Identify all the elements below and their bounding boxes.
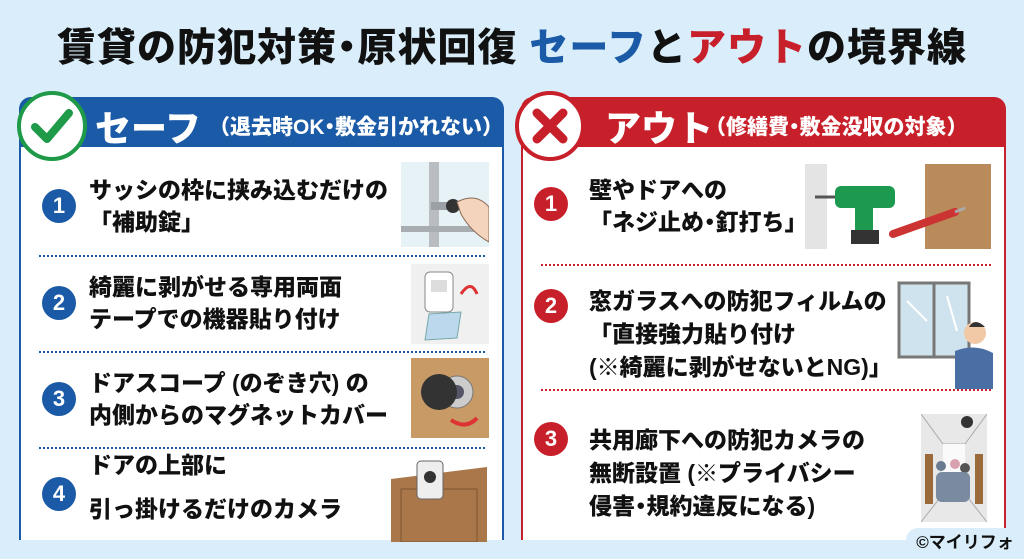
item 2: 綺麗に剥がせる専用両面 (89, 274, 342, 300)
title: 賃貸の防犯対策・原状回復 セーフとアウトの境界線 (57, 27, 967, 70)
item 1: 「補助錠」 (89, 209, 204, 235)
item 3 (42, 358, 489, 438)
icon: corridor camera (921, 414, 987, 522)
out header: （修繕費・敷金没収の対象） (705, 116, 968, 139)
safe header (19, 97, 504, 147)
item 1 (42, 162, 489, 247)
icon: sash lock (401, 162, 489, 247)
out item 3: 侵害・規約違反になる) (589, 493, 815, 519)
icon: window film (898, 282, 993, 389)
panel: safe (19, 97, 504, 540)
panel: out (521, 97, 1006, 540)
out item 2: (※綺麗に剥がせないとNG)」 (589, 354, 892, 380)
out item 1: 「ネジ止め・釘打ち」 (589, 209, 808, 235)
credit (906, 528, 1024, 559)
out header (521, 97, 1006, 147)
item 2 (42, 264, 489, 344)
out item 1 (534, 164, 991, 249)
item 4: ドアの上部に (89, 452, 227, 478)
item 1: サッシの枠に挟み込むだけの (89, 177, 388, 203)
out item 2 (534, 282, 993, 389)
out header: アウト (605, 108, 713, 149)
out item 3: 3 (545, 426, 557, 451)
item 4: 引っ掛けるだけのカメラ (89, 496, 342, 522)
item 2: テープでの機器貼り付け (89, 306, 341, 332)
icon: cross (515, 91, 585, 161)
out item 3: 共用廊下への防犯カメラの (589, 427, 865, 453)
icon: drill and screwdriver (805, 164, 991, 249)
icon: door scope (411, 358, 489, 438)
icon: door camera (391, 460, 487, 542)
item 1: 1 (53, 193, 65, 218)
icon: check (17, 91, 87, 161)
item 4 (42, 452, 487, 542)
item 4: 4 (53, 481, 65, 506)
out item 2: 窓ガラスへの防犯フィルムの (589, 288, 887, 314)
out item 3 (534, 414, 987, 522)
out item 2: 2 (545, 293, 557, 318)
out item 1: 壁やドアへの (589, 177, 727, 203)
safe header: （退去時OK・敷金引かれない） (209, 116, 503, 139)
out item 3: 無断設置 (※プライバシー (589, 460, 856, 486)
item 3: 3 (53, 386, 65, 411)
out item 2: 「直接強力貼り付け (589, 321, 796, 347)
item 3: ドアスコープ (のぞき穴) の (89, 370, 369, 396)
icon: tape device (411, 264, 489, 344)
out item 1: 1 (545, 191, 557, 216)
item 2: 2 (53, 290, 65, 315)
safe header: セーフ (95, 108, 201, 149)
credit: ©マイリフォ (916, 533, 1014, 552)
item 3: 内側からのマグネットカバー (89, 402, 388, 428)
